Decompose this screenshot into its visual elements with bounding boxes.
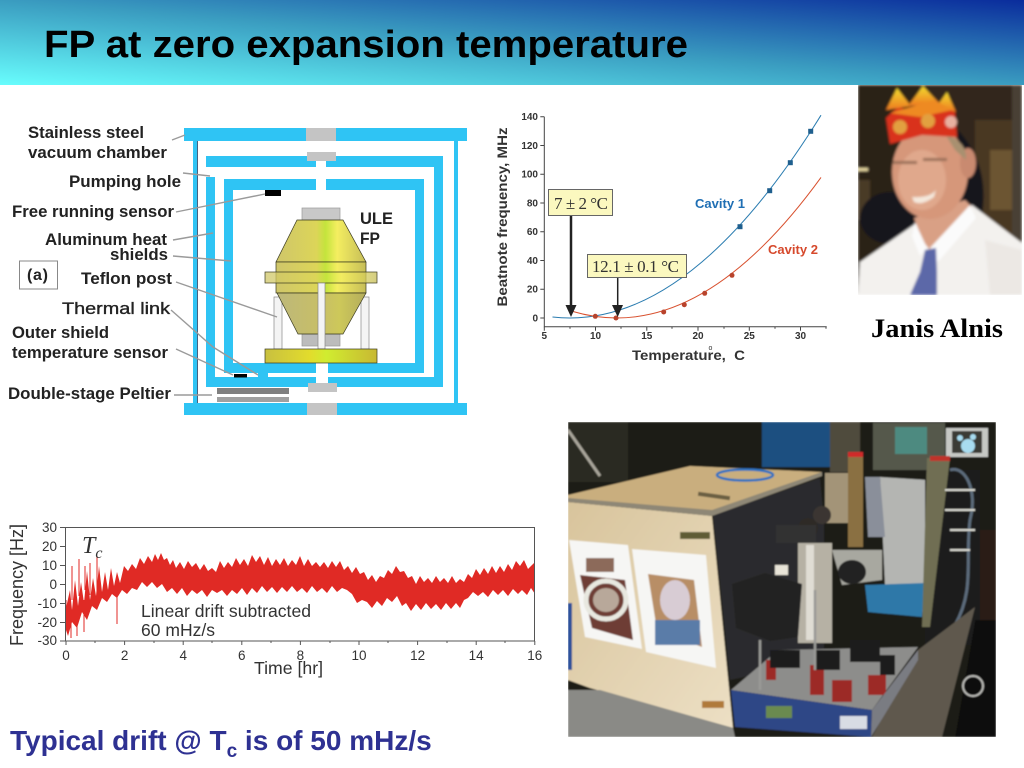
rack and cabling: [925, 470, 980, 645]
y tick labels: 140: [521, 112, 538, 123]
box side: [568, 502, 733, 728]
Peltier: [217, 388, 289, 402]
y tick labels: 30: [42, 520, 57, 535]
y tick labels: -30: [37, 633, 57, 648]
y tick labels: 10: [42, 558, 57, 573]
photo: laboratory setup: [568, 422, 996, 737]
y tick labels: 20: [42, 539, 57, 554]
diagram labels: Double-stage Peltier: [8, 385, 172, 403]
figure tag (a): (a): [27, 267, 48, 284]
oscilloscope: [873, 423, 945, 470]
label: cavity 2: Cavity 2: [768, 242, 818, 257]
drift trace: [66, 553, 535, 636]
y tick labels: 40: [527, 256, 538, 267]
footer note: c: [227, 741, 238, 762]
x tick labels: 10: [351, 648, 367, 663]
diagram labels: ULE: [360, 210, 393, 228]
electronics panels: [880, 477, 928, 587]
plot frame: [60, 528, 535, 645]
cable coil: [717, 470, 773, 480]
table bottom left: [568, 690, 735, 737]
x tick labels: 8: [297, 648, 304, 663]
annotation: linear drift: 60 mHz/s: [141, 620, 215, 640]
diagram labels: shields: [110, 246, 168, 264]
photo: Janis Alnis portrait: [858, 85, 1022, 295]
collar: [912, 205, 976, 262]
y tick labels: 80: [527, 198, 538, 209]
x axis title: o: [708, 345, 712, 352]
optical table: [731, 647, 918, 710]
left poster: [569, 540, 642, 649]
diagram labels: Pumping hole: [69, 173, 181, 191]
x tick labels: 6: [238, 648, 246, 663]
y tick labels: [37, 520, 57, 648]
diagram labels: Teflon post: [81, 270, 173, 288]
x tick labels: 2: [121, 648, 128, 663]
callout: 12.1 +- 0.1 C: 12.1 ± 0.1 °C: [592, 257, 679, 276]
black cube: [732, 573, 802, 641]
header banner: [0, 0, 1024, 85]
outer heat shield: [206, 156, 443, 387]
diagram labels: Aluminum heat: [45, 231, 168, 249]
title: FP at zero expansion temperature: [44, 24, 688, 66]
diagram labels: Free running sensor: [12, 203, 175, 221]
latch: [698, 492, 730, 500]
x tick labels: 5: [542, 331, 548, 342]
x tick labels: 30: [795, 331, 806, 342]
x tick labels: 14: [469, 648, 484, 663]
diagram labels: Outer shield: [12, 324, 109, 342]
x tick labels: 20: [692, 331, 704, 342]
y tick labels: 120: [521, 141, 538, 152]
y tick labels: 20: [527, 284, 538, 296]
chart: beatnote frequency vs temperature: [494, 112, 827, 363]
brass column: [848, 452, 863, 547]
figure tag (a): [20, 261, 58, 289]
cavity 1 curve: [552, 115, 821, 318]
optical mounts: [766, 660, 886, 702]
trace spikes: [66, 556, 117, 638]
face: [892, 125, 968, 219]
y tick labels: 0: [49, 577, 57, 592]
blue panel behind box: [568, 603, 572, 670]
axes: [540, 117, 827, 331]
x tick labels: 4: [179, 648, 187, 663]
x tick labels: [62, 648, 542, 663]
vacuum chamber: [184, 128, 467, 415]
dark figure behind: [859, 192, 914, 243]
table base: [731, 690, 872, 737]
name caption: Janis Alnis: [871, 314, 1003, 343]
x tick labels: [542, 331, 806, 342]
y tick labels: [521, 112, 538, 324]
Tc label: c: [95, 545, 102, 562]
ULE cavity: [265, 208, 377, 363]
arrow: 12.1 C: [612, 276, 623, 317]
panel: cavity cross-section diagram: [8, 124, 467, 415]
right poster: [632, 549, 716, 668]
callout: 7 +- 2 C: 7 ± 2 °C: [554, 194, 608, 213]
vacuum chamber: [798, 543, 832, 643]
inner heat shield: [224, 179, 424, 378]
diagram labels: Thermal link: [62, 300, 171, 318]
crown: [886, 103, 957, 144]
sensors: [234, 190, 281, 378]
diagram labels: [8, 124, 393, 403]
x axis title: Time [hr]: [254, 658, 323, 678]
Tc label: T: [82, 533, 95, 559]
diagram labels: Stainless steel: [28, 124, 144, 142]
x axis title: Temperature, C: [632, 347, 745, 363]
right bench: [872, 607, 975, 737]
y tick labels: 0: [532, 313, 538, 324]
annotation: linear drift: Linear drift subtracted: [141, 601, 311, 621]
label: cavity 1: Cavity 1: [695, 196, 745, 211]
arrow: 7 C: [566, 214, 576, 317]
y tick labels: -20: [37, 615, 57, 630]
footer note: Typical drift @ T: [10, 725, 227, 756]
neck: [914, 200, 972, 250]
lab background: [568, 422, 628, 482]
x tick labels: 25: [744, 331, 755, 342]
y tick labels: 60: [527, 227, 538, 238]
diagram labels: vacuum chamber: [28, 144, 168, 162]
y axis title: Frequency [Hz]: [7, 524, 27, 646]
x tick labels: 12: [410, 648, 425, 663]
diagram labels: FP: [360, 230, 380, 248]
annotation: linear drift: [141, 601, 311, 640]
x tick labels: 16: [527, 648, 542, 663]
x tick labels: 10: [590, 331, 601, 342]
box top: [568, 466, 822, 512]
y axis title: Beatnote frequency, MHz: [494, 128, 510, 306]
callout: 7 +- 2 C: [548, 190, 612, 216]
grey ports: [306, 128, 337, 415]
chart: frequency drift over time: [7, 520, 542, 678]
shirt: [858, 205, 1022, 295]
monitor: [946, 428, 988, 457]
diagram labels: temperature sensor: [12, 344, 169, 362]
cavity 2 curve: [572, 177, 821, 320]
leader lines: [171, 135, 277, 395]
box interior: [713, 478, 824, 680]
y tick labels: 100: [521, 170, 538, 180]
tie: [910, 248, 937, 295]
hair: [946, 136, 967, 160]
x tick labels: 15: [641, 331, 653, 342]
y tick labels: -10: [37, 596, 57, 611]
x tick labels: 0: [62, 648, 70, 663]
footer note: is of 50 mHz/s: [237, 725, 432, 756]
